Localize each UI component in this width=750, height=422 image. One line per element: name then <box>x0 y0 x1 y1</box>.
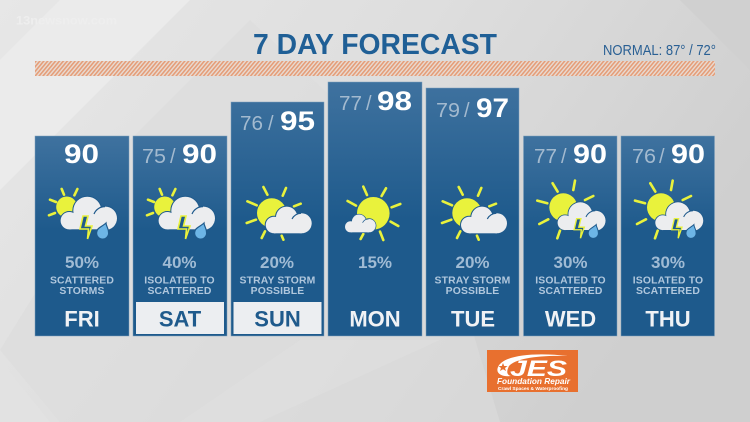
Saturday low and high temperature: / <box>170 146 176 168</box>
panel: Friday <box>35 136 129 336</box>
Saturday label box: SAT <box>159 307 202 332</box>
Saturday conditions: ISOLATED TO <box>144 275 215 286</box>
Tuesday low and high temperature: / <box>464 100 470 122</box>
Tuesday conditions: POSSIBLE <box>446 286 499 297</box>
Wednesday label: WED <box>545 307 596 332</box>
Thursday rain chance: 30% <box>651 253 685 272</box>
Sunday low and high temperature: 95 <box>280 106 315 136</box>
title: 7 DAY FORECAST <box>253 29 497 61</box>
Tuesday low and high temperature <box>436 93 509 123</box>
hatched orange divider band <box>35 61 715 76</box>
Monday label: MON <box>349 307 401 332</box>
Thursday low and high temperature: 76 <box>632 146 656 168</box>
Wednesday low and high temperature: 77 <box>534 146 557 168</box>
Tuesday rain chance: 20% <box>455 253 490 272</box>
Monday low and high temperature <box>339 86 412 116</box>
icon: large sun with storm cloud <box>537 181 606 238</box>
Monday low and high temperature: / <box>366 93 372 115</box>
Thursday conditions: ISOLATED TO <box>633 275 703 286</box>
Tuesday low and high temperature: 97 <box>476 93 509 123</box>
watermark: station website: 13newsnow.com <box>16 16 117 28</box>
panel: Tuesday <box>426 88 519 336</box>
Wednesday low and high temperature <box>534 139 607 169</box>
Sunday label box <box>234 302 322 334</box>
Wednesday rain chance: 30% <box>553 253 588 272</box>
icon: sun with cloud <box>442 187 507 240</box>
Wednesday low and high temperature: 90 <box>573 139 607 169</box>
Monday low and high temperature: 98 <box>377 86 412 116</box>
Monday rain chance: 15% <box>358 253 392 272</box>
Saturday low and high temperature <box>142 139 217 169</box>
Thursday low and high temperature: 90 <box>671 139 705 169</box>
Tuesday low and high temperature: 79 <box>436 100 460 122</box>
Wednesday low and high temperature: / <box>561 146 567 168</box>
icon: large sun with storm cloud <box>635 181 703 238</box>
Sunday conditions: STRAY STORM <box>240 275 315 286</box>
Saturday conditions: SCATTERED <box>147 286 212 297</box>
Wednesday conditions: ISOLATED TO <box>535 275 606 286</box>
icon: sun with cloud <box>247 187 312 240</box>
Tuesday conditions: STRAY STORM <box>435 275 510 286</box>
panel: Monday <box>328 82 422 336</box>
panel: Saturday <box>133 136 227 336</box>
Sunday low and high temperature <box>240 106 315 136</box>
Tuesday label: TUE <box>451 307 495 332</box>
Thursday label: THU <box>645 307 691 332</box>
Monday low and high temperature: 77 <box>339 93 362 115</box>
Friday label: FRI <box>64 307 100 332</box>
Wednesday conditions: SCATTERED <box>538 286 603 297</box>
normal temperatures: NORMAL: 87° / 72° <box>603 43 716 59</box>
sponsor logo: Foundation Repair <box>497 376 571 386</box>
Saturday label box <box>136 302 224 334</box>
Sunday low and high temperature: 76 <box>240 113 263 135</box>
Friday high temperature: 90 <box>64 139 99 169</box>
Sunday rain chance: 20% <box>260 253 294 272</box>
Saturday low and high temperature: 75 <box>142 146 166 168</box>
Saturday rain chance: 40% <box>162 253 197 272</box>
icon: sun with storm cloud <box>49 189 117 239</box>
Friday conditions: SCATTERED <box>50 275 114 286</box>
icon: sun with small cloud <box>345 187 400 240</box>
Friday conditions: STORMS <box>59 286 105 297</box>
Saturday low and high temperature: 90 <box>182 139 217 169</box>
panel: Sunday <box>231 102 324 336</box>
panel: Thursday <box>621 136 714 336</box>
Sunday low and high temperature: / <box>268 113 274 135</box>
Sunday label box: SUN <box>254 307 301 332</box>
sponsor logo: Crawl Spaces & Waterproofing <box>498 386 568 391</box>
Friday rain chance: 50% <box>65 253 99 272</box>
sponsor logo <box>487 350 578 392</box>
Sunday conditions: POSSIBLE <box>251 286 304 297</box>
icon: sun with storm cloud <box>147 189 215 239</box>
panel: Wednesday <box>524 136 617 336</box>
sponsor logo: JES <box>510 356 567 381</box>
Thursday low and high temperature: / <box>659 146 665 168</box>
Thursday conditions: SCATTERED <box>636 286 700 297</box>
Thursday low and high temperature <box>632 139 705 169</box>
